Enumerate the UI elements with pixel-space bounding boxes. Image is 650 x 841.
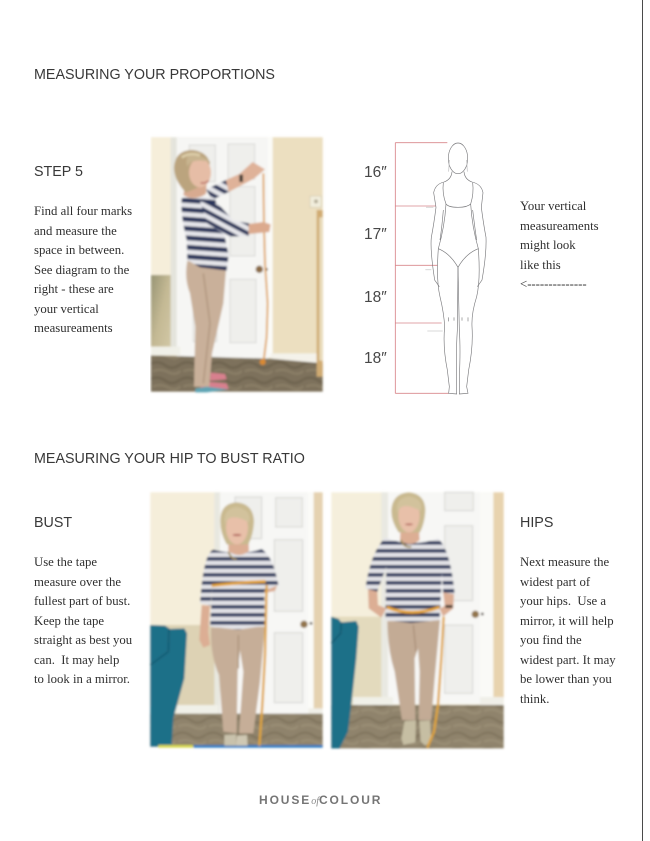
sofa bbox=[150, 625, 187, 747]
text block: vertical measurement note: <-------------- bbox=[520, 277, 587, 291]
text block: bust instructions: straight as best you bbox=[34, 633, 132, 647]
text block: vertical measurement note: Your vertical bbox=[520, 199, 586, 213]
text block: vertical measurement note: might look bbox=[520, 238, 576, 252]
text block: vertical measurement note: measureaments bbox=[520, 218, 599, 232]
shirt body bbox=[181, 195, 229, 271]
shirt bbox=[365, 538, 455, 623]
measurement label: 16 inches: 16″ bbox=[364, 164, 387, 181]
text block: step 5 instructions bbox=[34, 204, 132, 335]
text block: bust instructions bbox=[34, 555, 132, 686]
measurement label: 17 inches: 17″ bbox=[364, 226, 387, 243]
text block: step 5 instructions: your vertical bbox=[34, 302, 99, 316]
body outline bbox=[431, 143, 486, 394]
text block: step 5 instructions: measureaments bbox=[34, 321, 113, 335]
page edge line bbox=[642, 0, 643, 841]
measurement label: 18 inches lower: 18″ bbox=[364, 350, 387, 367]
text block: bust instructions: to look in a mirror. bbox=[34, 672, 130, 686]
text block: step 5 instructions: Find all four marks bbox=[34, 204, 132, 218]
arm skin bbox=[226, 162, 265, 192]
text block: bust instructions: fullest part of bust. bbox=[34, 594, 130, 608]
trousers bbox=[387, 620, 440, 720]
photo: bust measurement bbox=[148, 491, 324, 750]
text block: hips instructions: Next measure the bbox=[520, 555, 609, 569]
text block: bust instructions: Keep the tape bbox=[34, 614, 104, 628]
tape bbox=[212, 582, 266, 586]
heading: measuring your proportions: MEASURING YOUR PROPORTIONS bbox=[34, 67, 275, 83]
neck and head bbox=[400, 525, 420, 544]
text block: step 5 instructions: and measure the bbox=[34, 224, 117, 238]
text block: bust instructions: can. It may help bbox=[34, 652, 119, 666]
neck and head bbox=[228, 535, 249, 555]
heading: hips: HIPS bbox=[520, 515, 553, 531]
text block: vertical measurement note: like this bbox=[520, 258, 561, 272]
shirt bbox=[200, 549, 278, 630]
sofa bbox=[331, 617, 359, 748]
text block: hips instructions: think. bbox=[520, 692, 549, 706]
photo: hip measurement bbox=[330, 491, 506, 750]
heading: hip to bust ratio: MEASURING YOUR HIP TO BUST RATIO bbox=[34, 451, 305, 467]
photo: woman marking door with tape bbox=[150, 136, 324, 394]
text block: hips instructions: widest part of bbox=[520, 574, 590, 588]
text block: step 5 instructions: space in between. bbox=[34, 243, 124, 257]
heading: bust: BUST bbox=[34, 515, 72, 531]
trousers bbox=[211, 627, 265, 733]
text block: hips instructions: your hips. Use a bbox=[520, 594, 606, 608]
figure diagram: body proportions bbox=[394, 142, 486, 394]
forearms bbox=[368, 589, 386, 618]
text block: step 5 instructions: See diagram to the bbox=[34, 262, 129, 276]
text block: hips instructions: be lower than you bbox=[520, 672, 612, 686]
shoes bbox=[401, 720, 416, 745]
text block: hips instructions: widest part. It may bbox=[520, 652, 616, 666]
measure lines bbox=[395, 143, 449, 393]
text block: bust instructions: measure over the bbox=[34, 574, 121, 588]
text block: vertical measurement note bbox=[520, 199, 599, 291]
measurement label: 18 inches upper: 18″ bbox=[364, 289, 387, 306]
text block: hips instructions: mirror, it will help bbox=[520, 614, 614, 628]
logo: house of colour: HOUSEofCOLOUR bbox=[259, 793, 382, 807]
bottom strip bbox=[158, 745, 193, 748]
text block: hips instructions: you find the bbox=[520, 633, 582, 647]
neck, head bbox=[183, 180, 207, 198]
tape bbox=[263, 173, 268, 363]
text block: step 5 instructions: right - these are bbox=[34, 282, 114, 296]
text block: hips instructions bbox=[520, 555, 616, 706]
upper arm bbox=[200, 202, 249, 237]
feet bbox=[210, 373, 227, 381]
trousers bbox=[186, 261, 226, 387]
heading: step 5: STEP 5 bbox=[34, 164, 83, 180]
text block: bust instructions: Use the tape bbox=[34, 555, 97, 569]
arms skin bbox=[199, 605, 210, 648]
shoes bbox=[224, 734, 236, 746]
tape bbox=[387, 607, 440, 612]
